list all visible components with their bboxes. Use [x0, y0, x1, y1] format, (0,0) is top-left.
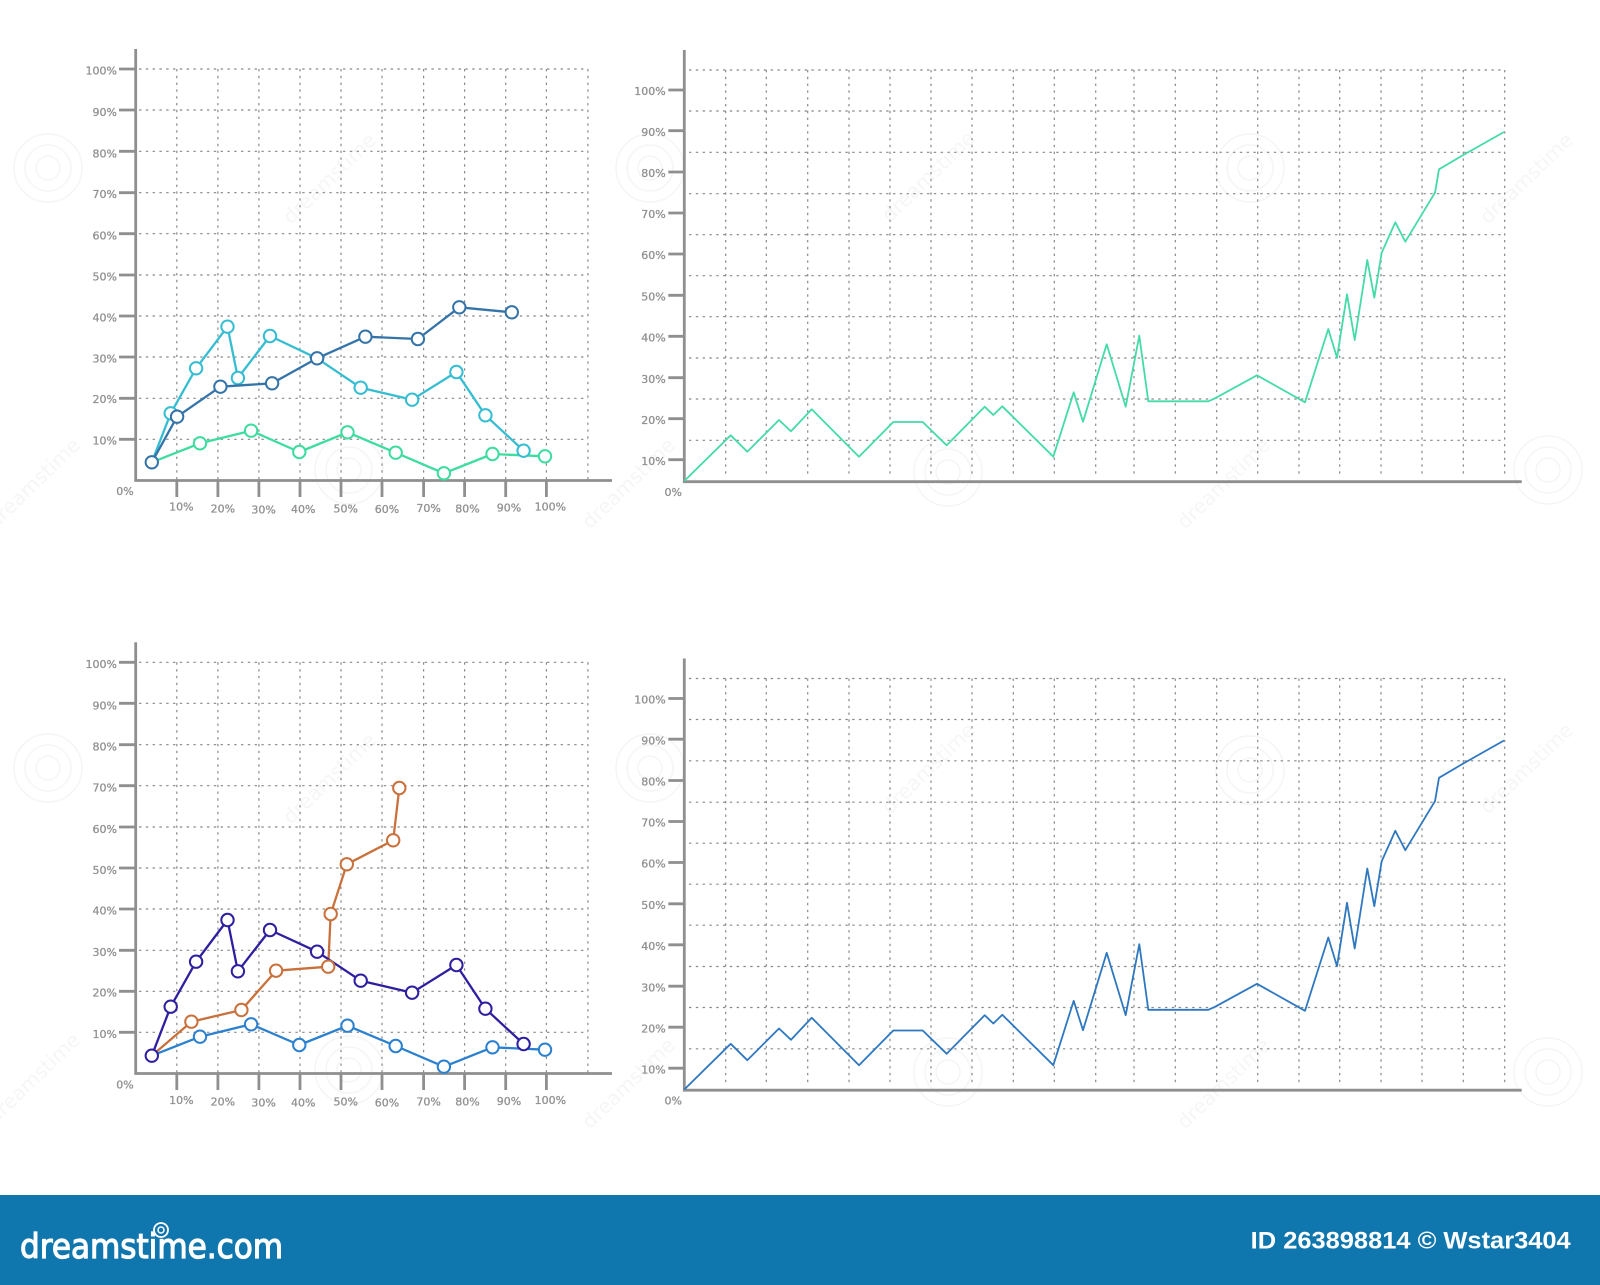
chart: bottom-right blue line chart	[634, 658, 1522, 1108]
x axis labels: 90%	[497, 1095, 521, 1108]
y axis labels: 30%	[93, 353, 117, 366]
text: dreamstime	[278, 128, 381, 229]
text: dreamstime	[1475, 128, 1578, 229]
series: dark blue	[146, 301, 518, 468]
x axis labels: 0%	[116, 485, 134, 498]
y axis labels: 100%	[86, 65, 117, 78]
y axis labels: 70%	[641, 208, 666, 221]
y axis labels: 80%	[641, 776, 666, 789]
text: dreamstime	[877, 126, 980, 227]
y axis labels: 70%	[641, 817, 666, 830]
x axis labels: 10%	[169, 501, 194, 514]
y axis labels: 80%	[93, 741, 117, 754]
y axis labels: 50%	[641, 899, 666, 912]
series: orange	[152, 782, 405, 1056]
x axis labels: 80%	[455, 1096, 480, 1109]
y axis labels: 40%	[641, 940, 666, 953]
y axis labels: 20%	[641, 1022, 666, 1035]
series: green	[152, 424, 551, 479]
chart: bottom-left three-series line chart	[86, 642, 612, 1110]
y axis labels: 40%	[93, 311, 117, 324]
y axis labels: 10%	[93, 435, 117, 448]
y axis labels	[86, 65, 117, 448]
y axis labels: 60%	[93, 230, 117, 243]
footer logo: dreamstime.com	[20, 1227, 283, 1267]
image id and credit: ID 263898814 © Wstar3404	[1251, 1227, 1571, 1254]
y axis labels: 50%	[641, 290, 666, 304]
x axis labels: 60%	[375, 503, 399, 516]
text: dreamstime	[577, 433, 680, 534]
x axis labels: 80%	[455, 502, 480, 515]
text: dreamstime	[577, 1033, 680, 1134]
y axis labels: 70%	[93, 188, 117, 201]
x axis labels: 70%	[416, 1095, 441, 1108]
x axis labels: 70%	[416, 502, 441, 515]
y axis labels: 90%	[93, 106, 117, 119]
y axis labels: 0%	[665, 1094, 682, 1108]
y axis labels: 100%	[634, 694, 666, 707]
y axis labels	[634, 694, 682, 1108]
series: purple	[146, 914, 530, 1062]
y axis labels: 80%	[93, 147, 117, 160]
chart: top-right green line chart	[634, 50, 1522, 499]
x axis labels: 20%	[211, 502, 235, 515]
x axis labels: 30%	[251, 1097, 276, 1110]
y axis labels: 80%	[641, 167, 666, 180]
x axis labels: 60%	[375, 1096, 399, 1109]
series: green trend line	[684, 132, 1504, 481]
y axis labels: 20%	[641, 414, 666, 427]
text: dreamstime	[1172, 1033, 1275, 1134]
y axis labels: 30%	[641, 981, 666, 994]
y axis labels: 100%	[634, 85, 666, 98]
y axis labels: 50%	[93, 864, 117, 877]
x axis labels: 50%	[333, 1096, 358, 1109]
x axis labels: 50%	[333, 502, 358, 515]
y axis labels: 70%	[93, 781, 117, 794]
y axis labels: 30%	[93, 946, 117, 959]
y axis labels: 20%	[93, 393, 117, 406]
y axis labels: 100%	[86, 658, 117, 671]
x axis labels: 40%	[291, 503, 315, 516]
y axis labels: 50%	[93, 271, 117, 284]
footer bar	[0, 1195, 1600, 1285]
text: dreamstime	[1475, 718, 1578, 819]
y axis labels: 60%	[641, 249, 666, 262]
x axis labels: 10%	[169, 1094, 194, 1107]
y axis labels: 90%	[641, 734, 666, 747]
y axis labels: 10%	[93, 1028, 117, 1041]
y axis labels	[86, 658, 117, 1041]
y axis labels: 40%	[93, 905, 117, 918]
y axis labels: 90%	[641, 126, 666, 139]
x axis labels	[116, 485, 566, 516]
y axis labels: 40%	[641, 332, 666, 344]
x axis labels: 90%	[497, 502, 521, 515]
y axis labels: 60%	[641, 858, 666, 871]
x axis labels: 30%	[251, 503, 276, 516]
x axis labels: 40%	[291, 1096, 315, 1109]
y axis labels: 60%	[93, 823, 117, 836]
x axis labels: 20%	[211, 1096, 235, 1109]
y axis labels	[634, 85, 682, 499]
y axis labels: 30%	[641, 373, 666, 386]
x axis labels: 0%	[116, 1078, 134, 1091]
chart: top-left three-series line chart	[86, 49, 612, 516]
series: teal	[152, 320, 530, 462]
text: dreamstime	[1172, 433, 1275, 534]
y axis labels: 20%	[93, 986, 117, 999]
y axis labels: 10%	[641, 455, 666, 468]
orange junction marker	[322, 960, 334, 973]
x axis labels: 100%	[535, 1094, 566, 1107]
y axis labels: 90%	[93, 699, 117, 712]
text: dreamstime	[278, 728, 381, 829]
text: dreamstime	[877, 718, 980, 819]
y axis labels: 0%	[665, 486, 682, 499]
y axis labels: 10%	[641, 1063, 666, 1076]
x axis labels	[116, 1078, 566, 1110]
series: blue trend line	[684, 740, 1504, 1090]
series: blue	[152, 1018, 551, 1073]
x axis labels: 100%	[535, 501, 566, 514]
